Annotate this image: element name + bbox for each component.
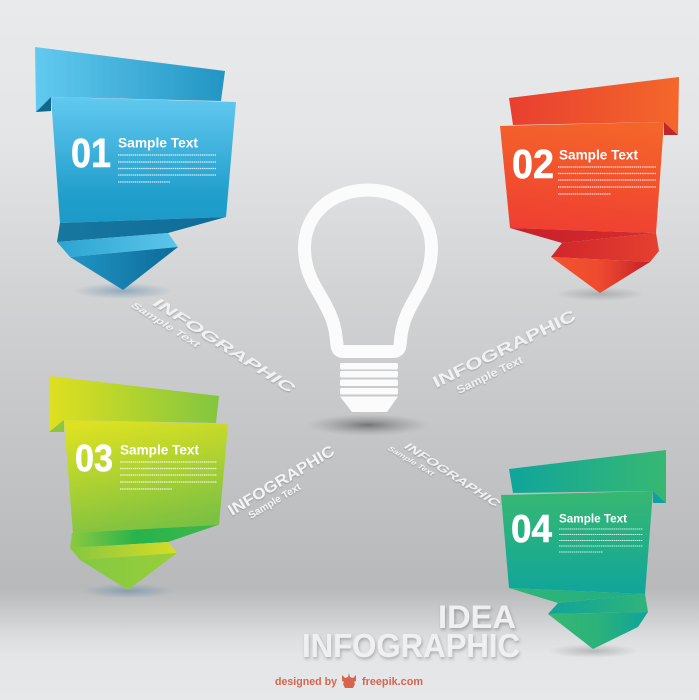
- icon: light bulb: [304, 190, 432, 412]
- label: infographic top left: INFOGRAPHIC: [148, 296, 301, 395]
- title: idea infographic: IDEA: [438, 599, 516, 635]
- footer: freepik credit: freepik.com: [362, 676, 423, 688]
- heading: sample text 03: Sample Text: [120, 442, 200, 458]
- title: idea infographic: INFOGRAPHIC: [302, 627, 520, 664]
- label: infographic bottom left: Sample Text: [247, 481, 304, 522]
- number 02: 02: [512, 141, 554, 187]
- panel: card 04 teal: [501, 450, 666, 658]
- footer: freepik credit: designed by: [275, 676, 338, 688]
- panel: card 01 blue: [35, 47, 236, 299]
- label: infographic top right: INFOGRAPHIC: [430, 307, 579, 392]
- icon: crown logo: [342, 673, 356, 688]
- dotted text lines 03: [120, 462, 217, 489]
- number 04: 04: [511, 508, 552, 551]
- label: infographic top right: [430, 307, 579, 397]
- panel: card 03 green: [49, 376, 228, 598]
- panel: card 02 red: [500, 77, 679, 301]
- heading: sample text 02: Sample Text: [559, 148, 639, 162]
- title: idea infographic: [302, 599, 520, 664]
- heading: sample text 01: Sample Text: [118, 136, 199, 150]
- footer: freepik credit: [275, 673, 423, 688]
- heading: sample text 04: Sample Text: [559, 512, 627, 526]
- label: infographic top left: [128, 296, 301, 395]
- label: infographic top right: Sample Text: [455, 354, 525, 397]
- number 03: 03: [75, 438, 113, 480]
- label: infographic bottom right: Sample Text: [386, 445, 437, 477]
- label: infographic top left: Sample Text: [128, 301, 204, 349]
- dotted text lines 02: [558, 167, 656, 194]
- label: infographic bottom right: INFOGRAPHIC: [401, 441, 504, 508]
- dotted text lines 04: [559, 529, 643, 552]
- icon: bulb shadow: [306, 414, 430, 436]
- dotted text lines 01: [118, 155, 216, 182]
- label: infographic bottom left: INFOGRAPHIC: [225, 443, 338, 519]
- number 01: 01: [71, 130, 111, 176]
